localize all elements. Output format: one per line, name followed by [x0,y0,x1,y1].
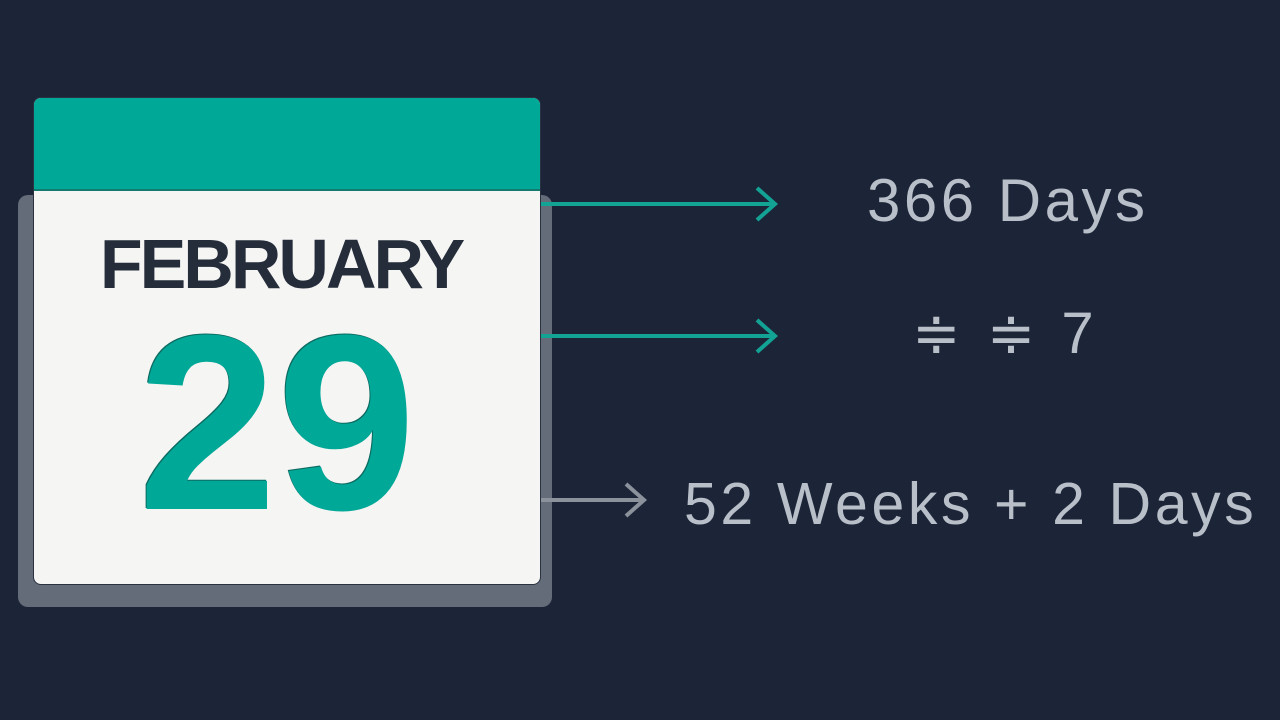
teal header [34,98,540,191]
text: 366 Days: 366 Days [867,167,1148,234]
arrow 1 [541,186,778,222]
calendar page [33,97,541,585]
arrow 3 [541,482,647,518]
day number: 29 [138,283,416,562]
text: divide symbols and 7: ≑ ≑ 7 [912,301,1094,366]
text: 52 Weeks + 2 Days: 52 Weeks + 2 Days [684,471,1257,537]
month label: FEBRUARY [100,225,462,303]
arrow 2 [541,318,778,354]
calendar icon [18,97,552,607]
calendar back shadow card [18,195,552,607]
